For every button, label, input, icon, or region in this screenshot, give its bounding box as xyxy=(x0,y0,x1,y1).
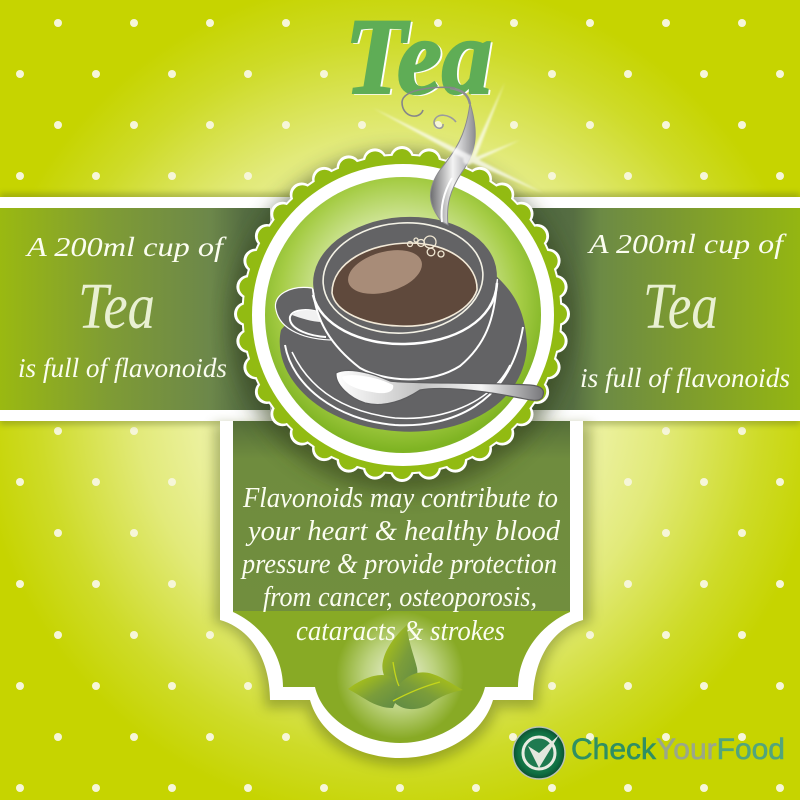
logo badge xyxy=(513,727,565,779)
scallop white xyxy=(246,158,558,470)
panel: banner left xyxy=(0,208,270,410)
text block: right banner: Tea xyxy=(643,270,718,343)
steam xyxy=(402,87,475,225)
label shadow xyxy=(214,424,591,766)
leaf glow xyxy=(336,611,464,741)
panel: flavonoid label xyxy=(214,421,591,766)
text block: left banner: is full of flavonoids xyxy=(18,353,227,383)
cup rim xyxy=(309,211,501,347)
label lower green xyxy=(233,609,570,743)
text block: flavonoids: Flavonoids may contribute to xyxy=(242,483,558,514)
panel: banner white stripes xyxy=(0,197,800,421)
tea bubbles xyxy=(408,236,444,257)
green valley fill xyxy=(244,156,560,472)
badge: scalloped circle xyxy=(232,152,572,492)
badge shadow xyxy=(232,152,572,492)
text block: right banner: A 200ml cup of xyxy=(587,229,787,259)
text block: right banner xyxy=(580,229,790,393)
scallop green xyxy=(247,159,557,469)
text block: flavonoids: your heart & healthy blood xyxy=(245,516,561,547)
cup handle xyxy=(275,287,335,340)
cup rim lines xyxy=(313,283,497,344)
logo: Check Your Food xyxy=(513,727,785,779)
text block: left banner: A 200ml cup of xyxy=(25,232,227,262)
icon: tea leaves xyxy=(348,625,463,709)
text block: flavonoids xyxy=(240,483,561,647)
label white border xyxy=(220,421,583,758)
cup body xyxy=(313,280,497,379)
tea highlight xyxy=(343,242,427,302)
text block: flavonoids: pressure & provide protection xyxy=(240,549,557,580)
icon: sparkle xyxy=(373,82,543,193)
text block: right banner: is full of flavonoids xyxy=(580,363,790,393)
white valley fill xyxy=(242,154,562,474)
logo wordmark: CheckYourFood xyxy=(571,733,785,766)
panel: banner shadow xyxy=(0,193,800,425)
text block: left banner: Tea xyxy=(78,270,155,343)
icon: tea cup and saucer xyxy=(275,87,544,432)
saucer xyxy=(280,270,527,432)
title: Tea xyxy=(347,0,494,118)
tea surface xyxy=(332,243,477,326)
text block: flavonoids: cataracts & strokes xyxy=(296,616,505,647)
spoon xyxy=(336,370,544,405)
panel: banner right xyxy=(530,208,800,410)
label upper green xyxy=(233,421,570,611)
text block: left banner xyxy=(18,232,227,383)
title: Tea xyxy=(345,0,492,117)
white ring xyxy=(252,164,554,466)
inner disc xyxy=(265,177,541,453)
text block: flavonoids: from cancer, osteoporosis, xyxy=(263,582,537,613)
